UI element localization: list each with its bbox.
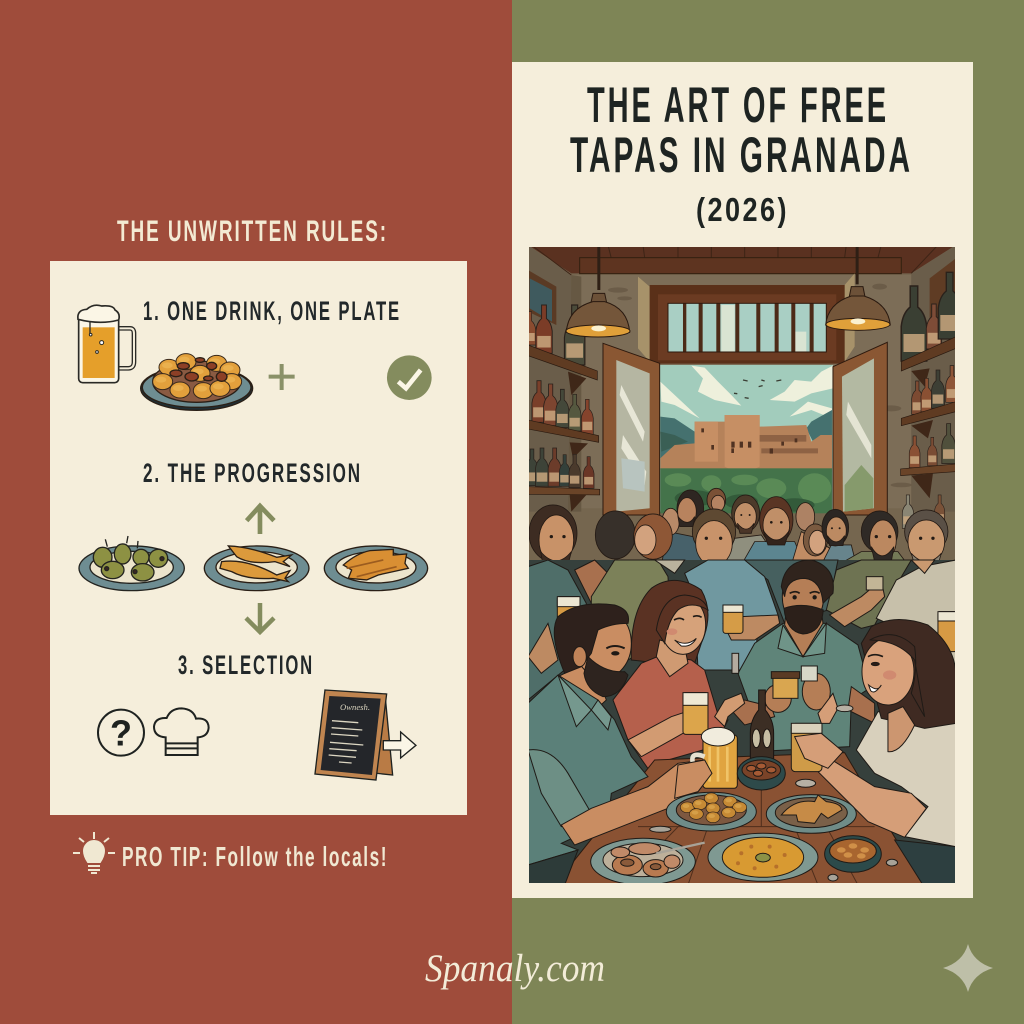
icon: chef hat — [154, 708, 209, 755]
lamp: right — [826, 245, 890, 330]
crowd: background heads — [529, 488, 948, 566]
icon: patatas bravas plate — [141, 354, 253, 410]
background: terracotta half — [0, 0, 512, 1024]
illustration: crowded tapas bar with Alhambra view — [524, 245, 961, 885]
tapas dishes — [591, 757, 898, 885]
window frame — [650, 285, 845, 364]
icon: fried fish plate — [204, 546, 309, 591]
open door right — [833, 342, 887, 515]
icons row in panel: rule 3 — [98, 690, 416, 780]
standing crowd — [528, 560, 956, 700]
rule 2 heading: 2. THE PROGRESSION — [143, 458, 362, 488]
icon: arrow down — [246, 603, 274, 632]
icons row in panel: rule 1 and rule 2 — [78, 305, 432, 591]
title — [570, 77, 913, 228]
icon: arrow up — [247, 506, 274, 534]
icon: menu chalkboard: Ownesh. — [340, 702, 370, 712]
icon: question circle: ? — [110, 712, 132, 753]
bottle on table — [750, 690, 774, 759]
bearded man in teal, back centre — [730, 560, 875, 752]
lower scene: diners at table — [528, 560, 956, 885]
pro tip: PRO TIP: Follow the locals! — [122, 841, 388, 872]
icon: plus — [269, 364, 295, 390]
rule 1 heading: 1. ONE DRINK, ONE PLATE — [143, 296, 401, 326]
icon: beer mug — [78, 305, 134, 383]
background: olive half — [512, 0, 1024, 1024]
view: Alhambra landscape — [660, 365, 833, 513]
icon: arrow right — [383, 732, 416, 758]
icon: olives plate — [79, 536, 184, 591]
icon: sparkle — [943, 944, 993, 992]
title: (2026) — [696, 191, 789, 228]
icon: question circle — [98, 710, 144, 756]
brand: spanaly.com: Spanaly.com — [425, 947, 605, 990]
open door left — [603, 343, 660, 515]
shelves and bottles: right — [901, 258, 961, 528]
heading: the unwritten rules: THE UNWRITTEN RULES: — [117, 215, 388, 248]
lamp: left — [566, 245, 630, 337]
big beer mug — [692, 727, 737, 788]
woman on right — [791, 620, 956, 885]
rule 3 heading: 3. SELECTION — [178, 650, 314, 680]
foreground man in teal shirt — [528, 604, 737, 885]
panel: rules — [50, 261, 467, 815]
icon: check badge — [387, 355, 432, 400]
woman in red shirt — [613, 580, 745, 773]
icon: menu chalkboard — [315, 690, 393, 780]
panel: title card — [512, 62, 973, 898]
upper scene: bar interior — [524, 245, 961, 566]
icon: breaded cutlet plate — [324, 546, 428, 591]
shelves and bottles: left — [524, 270, 600, 512]
table — [555, 753, 923, 885]
icon: lightbulb — [73, 832, 115, 873]
